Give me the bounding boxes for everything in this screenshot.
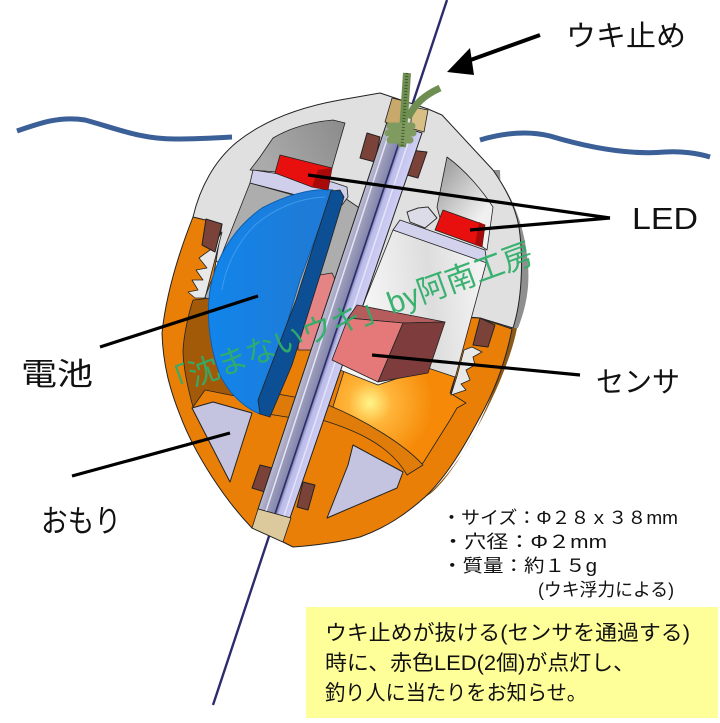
inner grey body behind battery xyxy=(205,183,372,330)
O-ring lower right of shaft xyxy=(297,482,315,510)
callout: 釣り人に当たりをお知らせ。 xyxy=(325,682,587,705)
lower shell (orange) xyxy=(162,217,512,547)
float cross-section xyxy=(162,93,528,547)
battery rim highlight xyxy=(222,197,325,290)
LED: right xyxy=(393,207,487,263)
right thread (white) xyxy=(451,347,482,395)
callout: 時に、赤色LED(2個)が点灯し、 xyxy=(325,652,635,675)
upper shell (grey) xyxy=(193,93,522,328)
sensor xyxy=(332,305,445,382)
left thread (white) xyxy=(188,232,222,298)
label: stopper: ウキ止め xyxy=(566,20,686,53)
O-ring lower left of shaft xyxy=(252,465,272,492)
specifications: ・穴径：Φ２mm xyxy=(442,532,607,552)
specifications: ・サイズ：Φ２８ｘ３８mm xyxy=(442,508,678,528)
right lower ledge xyxy=(290,425,353,520)
right weight cavity xyxy=(327,445,403,518)
water surface: right xyxy=(480,133,710,157)
left lower dark pocket xyxy=(183,298,245,407)
watermark: 「沈まないウキ」by阿南工房 xyxy=(155,236,538,404)
orange ledge under battery xyxy=(268,393,300,418)
orange ring under glow xyxy=(322,405,423,475)
specifications: (ウキ浮力による) xyxy=(538,580,674,600)
LED: left xyxy=(275,155,332,190)
pink block behind shaft xyxy=(298,273,345,350)
label: battery: 電池 xyxy=(21,357,93,392)
water surface: left xyxy=(17,119,232,139)
battery xyxy=(208,190,344,417)
bottom cap xyxy=(252,509,291,542)
upper shell shadow xyxy=(493,170,528,328)
shaft xyxy=(258,122,422,518)
O-ring upper left of shaft xyxy=(360,133,380,162)
callout: ウキ止めが抜ける(センサを通過する) xyxy=(325,622,690,645)
bobber stopper knot (green) xyxy=(388,73,440,147)
specifications: ・質量：約１５g xyxy=(442,556,597,576)
specifications xyxy=(442,508,678,600)
label: LED: LED xyxy=(632,201,698,236)
left weight cavity xyxy=(192,402,252,482)
leader lines xyxy=(72,175,610,476)
arrow to stopper xyxy=(447,35,540,75)
fishing line xyxy=(213,0,447,705)
callout xyxy=(306,607,718,718)
left gray pocket xyxy=(250,120,345,172)
right gray pocket xyxy=(437,157,493,250)
label: sensor: センサ xyxy=(596,367,680,399)
battery edge band xyxy=(258,190,344,417)
inner orange glow xyxy=(332,366,466,473)
right white wall xyxy=(340,230,487,393)
lower shell shadow xyxy=(425,328,517,497)
O-ring upper right of shaft xyxy=(407,150,427,178)
pcb: left xyxy=(250,170,348,205)
left O-ring xyxy=(202,219,222,252)
right O-ring xyxy=(473,318,495,347)
battery dome xyxy=(208,190,333,414)
top cap xyxy=(385,98,428,132)
label: weight: おもり xyxy=(41,504,121,539)
